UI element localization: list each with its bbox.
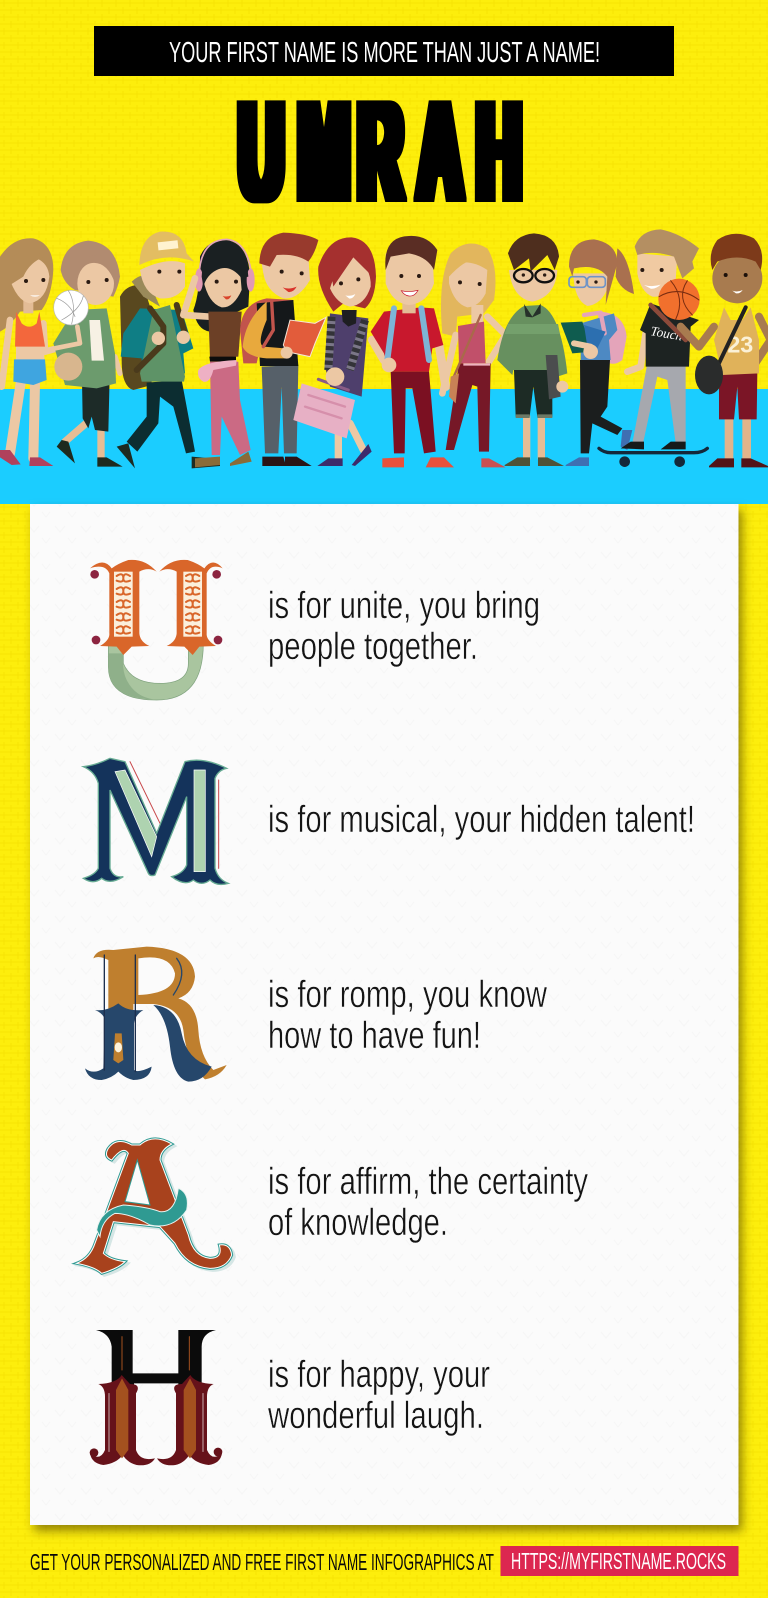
character: boy in basketball tank [695,234,768,467]
character: skateboarder holding a basketball: Touch [649,323,684,344]
text: A meaning: of knowledge. [268,1202,448,1244]
character: girl in orange top [0,238,75,466]
text: U meaning: people together. [268,626,478,668]
header banner [94,26,674,76]
decorative letter U [90,560,223,700]
decorative letter R [85,947,227,1082]
character: boy in basketball tank: 23 [727,332,753,358]
decorative letter A [77,1139,234,1275]
text: U meaning: is for unite, you bring [268,585,540,627]
text: R meaning: is for romp, you know [268,974,547,1016]
text: R meaning [268,974,547,1057]
character: boy reading a book [240,233,326,466]
decorative letter H [90,1330,222,1465]
title: UMRAH: UMRAH [239,73,521,231]
character: girl with pink bag [293,237,376,466]
floor band [0,389,768,504]
text: H meaning [267,1354,490,1437]
text: H meaning: wonderful laugh. [267,1395,484,1437]
text: A meaning [268,1161,588,1244]
character: girl with tablet and ponytail [561,239,634,466]
illustration: group of twelve students, right half [371,229,768,467]
text: A meaning: is for affirm, the certainty [268,1161,588,1203]
character: skateboarder holding a basketball [599,229,714,467]
text: U meaning [268,585,540,668]
text: H meaning: is for happy, your [268,1354,490,1396]
character: girl with volleyball [53,241,123,467]
panel: white card with letter meanings [30,504,738,1525]
character: blonde girl [441,244,506,467]
character: boy in red shirt [371,236,454,467]
character: hiker with backpack and cap [117,232,220,468]
illustration: group of twelve students, left half [0,232,376,468]
decorative letter M [83,758,228,884]
character: girl with headphones [183,239,255,467]
text: R meaning: how to have fun! [268,1015,481,1057]
character: boy with glasses and green sweater [497,233,568,466]
